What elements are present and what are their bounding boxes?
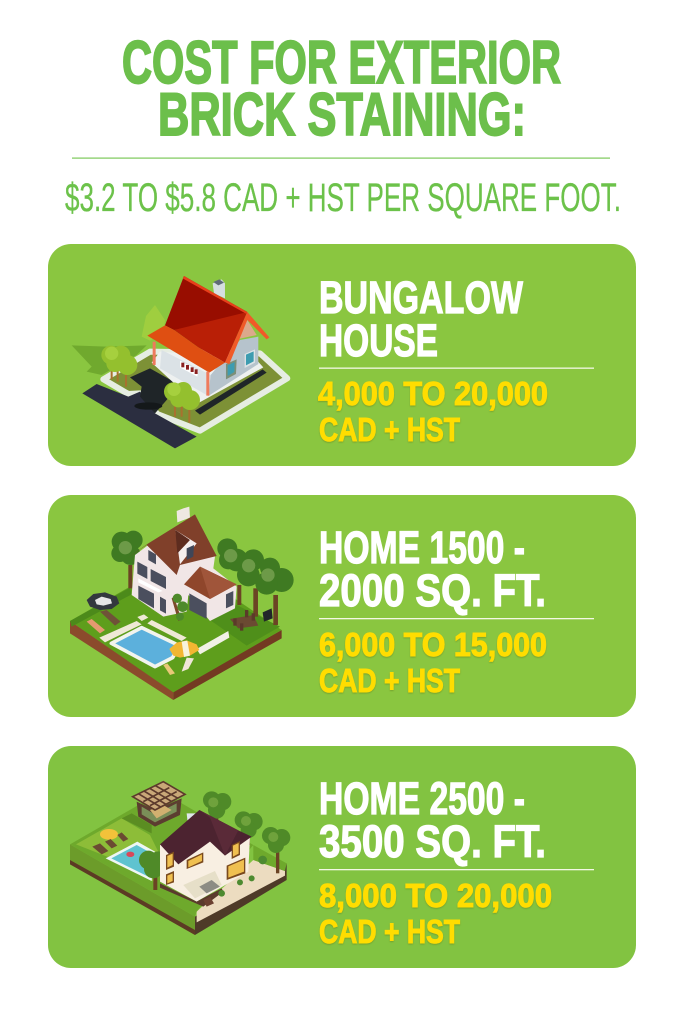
price: home 2500 - 3500 sq ft — [319, 878, 552, 951]
panel: home 2500 to 3500 sq ft — [48, 746, 636, 968]
price: home 1500 - 2000 sq ft: 6,000 TO 15,000 — [319, 627, 547, 664]
price: home 1500 - 2000 sq ft: CAD + HST — [319, 663, 460, 700]
heading: bungalow house: BUNGALOW — [319, 272, 523, 323]
title: BRICK STAINING: — [158, 81, 526, 148]
price: home 1500 - 2000 sq ft — [319, 627, 547, 700]
price: bungalow house: CAD + HST — [319, 412, 460, 449]
heading: bungalow house — [319, 272, 523, 366]
price: bungalow house: 4,000 TO 20,000 — [318, 376, 548, 413]
heading: home 2500 - 3500 sq ft: 3500 SQ. FT. — [319, 816, 546, 867]
heading: home 2500 - 3500 sq ft — [319, 773, 546, 867]
heading: home 1500 - 2000 sq ft — [319, 522, 546, 616]
pergola — [133, 782, 185, 827]
price: home 2500 - 3500 sq ft: CAD + HST — [319, 914, 460, 951]
heading: home 1500 - 2000 sq ft: HOME 1500 - — [319, 522, 525, 573]
panel: home 1500 to 2000 sq ft — [48, 495, 636, 717]
price: home 2500 - 3500 sq ft: 8,000 TO 20,000 — [319, 878, 552, 915]
panel: bungalow house — [48, 244, 636, 466]
heading: home 1500 - 2000 sq ft: 2000 SQ. FT. — [319, 565, 546, 616]
title — [122, 29, 561, 148]
price: bungalow house — [318, 376, 548, 449]
umbrella: striped — [87, 592, 119, 610]
illustration: bungalow house — [72, 276, 287, 448]
illustration: house with pool — [70, 507, 294, 700]
illustration: large house with pergola — [70, 782, 290, 935]
heading: bungalow house: HOUSE — [319, 315, 438, 366]
heading: home 2500 - 3500 sq ft: HOME 2500 - — [319, 773, 525, 824]
